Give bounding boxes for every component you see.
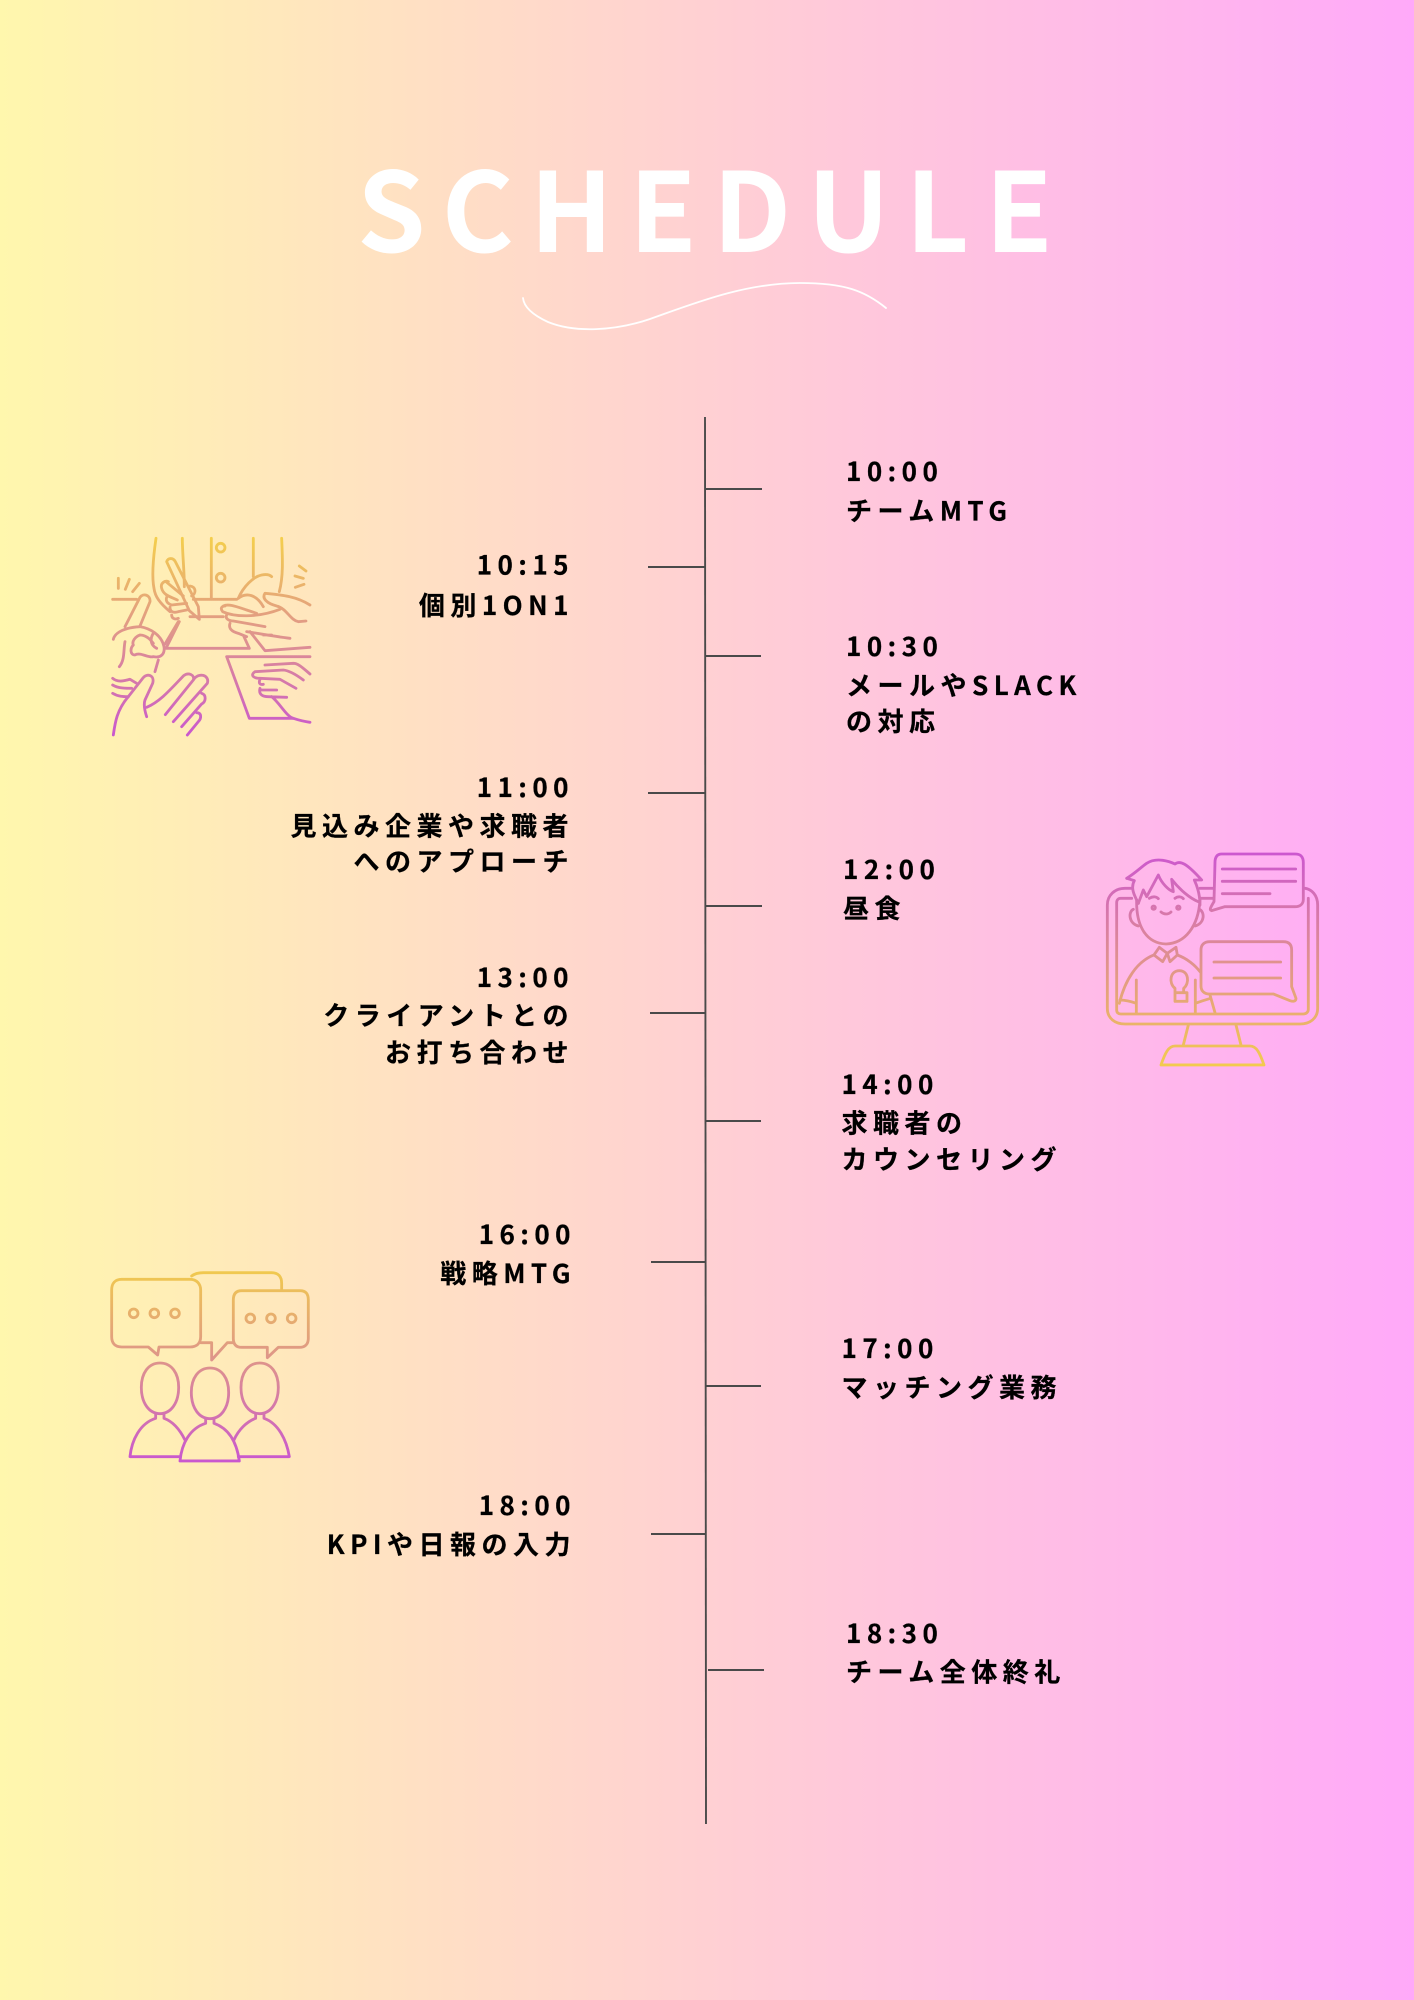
entry: 13:00: お打ち合わせ — [385, 1033, 574, 1070]
icon: hands working on documents — [113, 538, 310, 735]
entry: 12:00: 昼食 — [843, 889, 906, 926]
entry: 11:00: へのアプローチ — [353, 842, 574, 879]
entry: 10:30: メールやSLACK — [846, 666, 1082, 703]
entry: 14:00: 求職者の — [842, 1104, 968, 1140]
entry: 16:00: 16:00 — [479, 1215, 576, 1252]
entry: 18:00 — [327, 1486, 576, 1562]
entry: 10:30: の対応 — [846, 702, 941, 739]
entry: 18:30: チーム全体終礼 — [846, 1652, 1066, 1690]
entry: 11:00: 見込み企業や求職者 — [290, 806, 574, 844]
entry: 18:00: 18:00 — [479, 1486, 576, 1523]
timeline axis — [648, 417, 764, 1824]
entry: 18:30: 18:30 — [846, 1614, 943, 1651]
entry: 10:30: 10:30 — [846, 627, 943, 664]
entry: 18:30 — [846, 1614, 1066, 1690]
entry: 14:00: カウンセリング — [842, 1140, 1062, 1177]
entry: 10:30 — [846, 627, 1082, 739]
entry: 10:15: 10:15 — [477, 546, 574, 582]
entry: 18:00: KPIや日報の入力 — [327, 1525, 576, 1562]
entry: 10:15 — [419, 546, 574, 623]
entry: 12:00 — [843, 850, 940, 926]
entry: 13:00 — [323, 958, 574, 1070]
entry: 10:00: 10:00 — [846, 452, 943, 489]
entry: 14:00 — [842, 1065, 1062, 1177]
title: SCHEDULE — [357, 124, 1069, 284]
entry: 17:00: 17:00 — [842, 1329, 939, 1366]
entry: 13:00: クライアントとの — [323, 996, 574, 1033]
icon: three people talking — [112, 1273, 308, 1461]
icon: person on monitor with speech bubbles — [1107, 854, 1318, 1065]
entry: 16:00 — [440, 1215, 576, 1291]
entry: 12:00: 12:00 — [843, 850, 940, 887]
entry: 13:00: 13:00 — [477, 958, 574, 995]
entry: 17:00 — [842, 1329, 1062, 1405]
entry: 14:00: 14:00 — [842, 1065, 939, 1102]
entry: 11:00: 11:00 — [477, 768, 574, 805]
entry: 10:00: チームMTG — [846, 492, 1012, 528]
title underline swash — [523, 283, 886, 329]
entry: 17:00: マッチング業務 — [842, 1368, 1062, 1405]
entry: 16:00: 戦略MTG — [440, 1254, 576, 1291]
entry: 10:15: 個別1ON1 — [419, 586, 574, 623]
entry: 10:00 — [846, 452, 1012, 528]
entry: 11:00 — [290, 768, 574, 879]
